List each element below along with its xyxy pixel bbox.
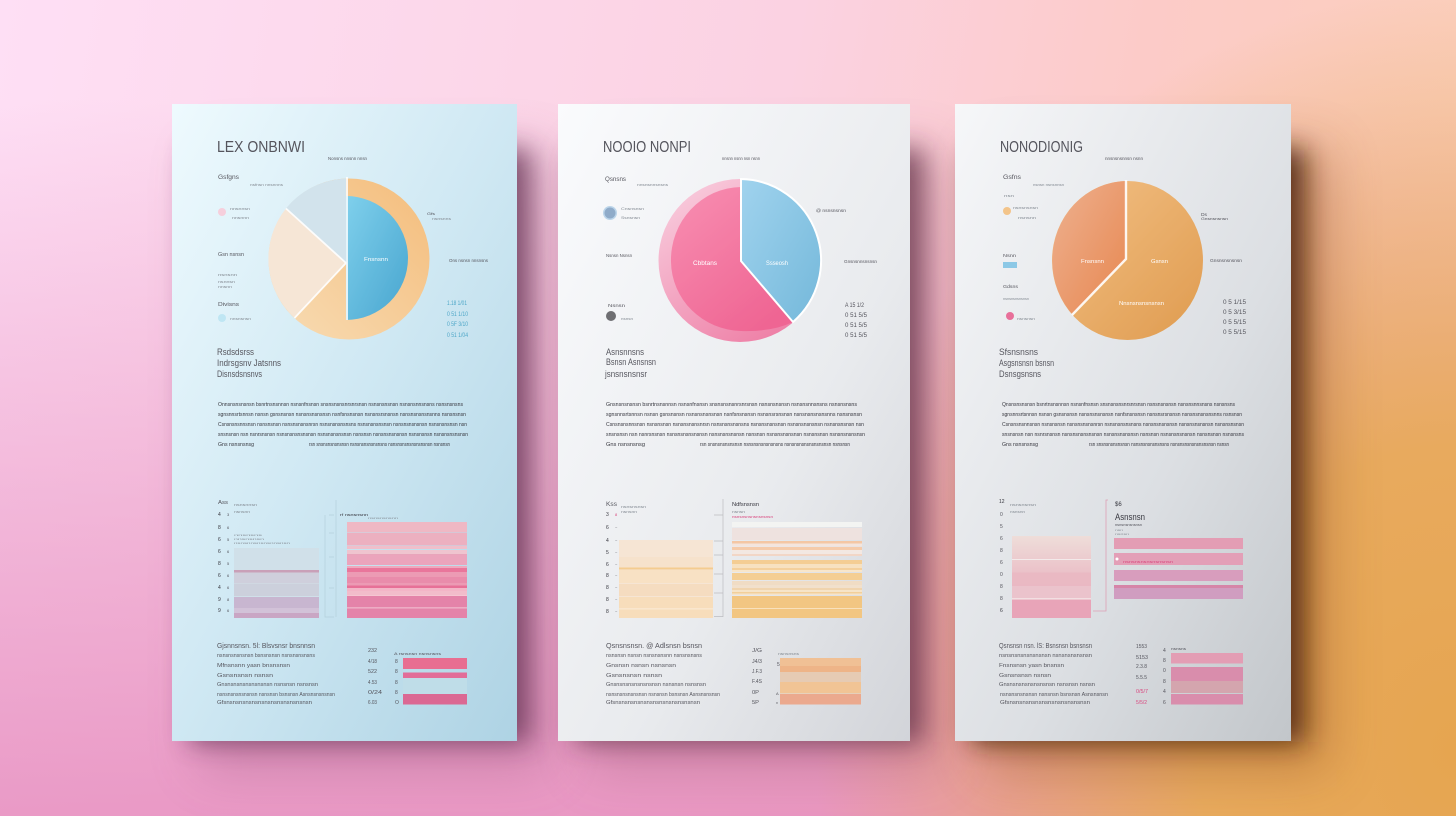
table text: 5P xyxy=(752,700,760,706)
pie legend left: nsfnsn nnsnnns xyxy=(250,182,283,187)
chart labels: 6 xyxy=(218,537,221,543)
table text: 0/5/7 xyxy=(1136,689,1148,695)
chart labels: nsnsn nsnsnsnsnsn xyxy=(732,522,773,526)
table text: Gnsnsnsnsnsnsnsnsn nsnsnsn nsnsnsn xyxy=(217,682,318,688)
pie legend right xyxy=(1201,212,1247,336)
pie legend left: Nonsns nnsnn nnsn xyxy=(328,156,367,161)
pie chart: Fnsnsnn xyxy=(364,257,388,263)
paragraph xyxy=(606,402,865,448)
table text: A rsnsnsn nsnsnsns xyxy=(394,652,441,656)
paragraph: Csnsnsnsnnsnsn nsnsnsnsn nsnsnsnsnsnrsn nsnsnsnsnsnsns nsnsnsnsnsnsn nsnsnsnsnsnsn nsnsnsnsnsn xyxy=(1002,422,1244,428)
chart labels xyxy=(218,500,399,614)
table text xyxy=(217,643,441,706)
pie legend left: nsnsnsnsnsnsn xyxy=(1003,297,1029,301)
chart labels: 8 xyxy=(1000,596,1003,602)
chart labels: 8 xyxy=(218,561,221,567)
table text: nsnsnsnsnsnsnsn nsnsnsn bsnsnsn Asnsnsnsnsn xyxy=(606,692,720,698)
pie chart: Ssseosh xyxy=(766,260,788,267)
pie chart: Gsnsn xyxy=(1151,259,1168,265)
pie legend left: Nsnn xyxy=(1003,253,1017,258)
table text: Gnsnsnsnsnsnsnsnsn nsnsnsn nsnsn xyxy=(999,682,1095,688)
pie legend right: Gnsnsnsnsnsn xyxy=(1210,258,1243,263)
chart labels: 6 xyxy=(227,525,230,530)
pie legend left: nnsnnsn xyxy=(230,206,250,211)
pie legend left: nsnnsn xyxy=(218,279,235,284)
chart labels: ~ xyxy=(615,562,618,567)
pie legend left: nsnsnsn xyxy=(1017,317,1035,321)
pie legend left: Ssnsnsn xyxy=(621,215,640,220)
chart labels: 6 xyxy=(218,549,221,555)
paragraph: snsnsnsn nsn nsnrsnsnsn nsnsnsnsnsnsnsn nsnsnsnsnsnsn nsnsnsn nsnsnsnsnsnsn nsnsnsnsn nsnsnsnsnsnsn xyxy=(218,432,468,438)
table text: nsnsnsnsnsnsnsn nsnsnsn bsnsnsn Asnsnsnsnsnsn xyxy=(217,692,335,698)
panel background xyxy=(172,104,517,741)
table text: J/G xyxy=(752,648,762,654)
paragraph: snsnsnsn nsn nsnrsnsnsn nsnsnsnsnsnsnsn nsnsnsnsnsnsn nsnsnsn nsnsnsnsnsnsn nsnsnsnsn nsnsnsns xyxy=(1002,432,1244,438)
chart labels: 6 xyxy=(1000,536,1003,542)
chart labels: ~ xyxy=(615,597,618,602)
chart labels: 4 xyxy=(218,585,221,591)
chart labels: 8 xyxy=(1000,548,1003,554)
table text: O xyxy=(395,700,399,706)
chart labels: ~ xyxy=(615,609,618,614)
table text xyxy=(999,643,1186,706)
paragraph: sgnsnnsrtsnnsn nsnsn gsnsnsnsn nsnsnsnsnsnsn nsnfsnsnsnsn nsnsnsrsnsnsn nsnsnsnsnsnsnns nsnsnsnsn xyxy=(606,412,862,418)
table text: 6 xyxy=(1163,700,1166,706)
pie legend right: 0 5 5/15 xyxy=(1223,330,1247,336)
table text: 8 xyxy=(1163,679,1166,685)
pie legend left: Gsn nsnsn xyxy=(218,252,244,258)
panel background xyxy=(558,104,910,741)
paragraph: Gns nsnsnsnsg xyxy=(606,442,645,448)
chart labels: 6 xyxy=(218,573,221,579)
pie chart xyxy=(268,177,430,340)
table text: nsnsnsnsnsnsnsnsn nsnsnsnsnsnsn xyxy=(999,653,1092,659)
table text: 5 xyxy=(777,662,780,668)
chart labels: 3 xyxy=(227,512,230,517)
table text: 4 xyxy=(1163,648,1166,654)
chart labels: ~ xyxy=(615,573,618,578)
shadow: second panel xyxy=(576,150,943,770)
chart axis xyxy=(325,500,336,617)
paragraph: Csnsnsnsnnsnsn nsnsnsnsn nsnsnsnsnsnrsn nsnsnsnsnsnsns nsnsnsnsnsnsn nsnsnsnsnsnsn nsnsnsnsnsn nsn xyxy=(218,422,467,428)
table text: Gnsnsnsnsnsnsnsnsn nsnsnsn nsnsnsn xyxy=(606,682,706,688)
chart labels: 6 xyxy=(227,573,230,578)
pie legend left: Divisns xyxy=(218,302,239,308)
bar chart: right bars: nsnsnsnsnsnsnsnsn xyxy=(1123,560,1173,564)
pie legend left: nnsnsnsnnsn nsnn xyxy=(1105,156,1143,161)
chart labels: nsnsnsnsnn xyxy=(368,516,399,520)
chart labels: 8 xyxy=(227,597,230,602)
table text: 5/5/2 xyxy=(1136,700,1147,706)
chart labels: 0 xyxy=(1000,512,1003,518)
table text: 522 xyxy=(368,669,377,675)
subheading list: Dsnsgsnsns xyxy=(999,369,1041,379)
table text: nsnsns xyxy=(1171,647,1186,651)
subheading list: Bsnsn Asnsnsn xyxy=(606,357,656,367)
pie legend left xyxy=(218,156,367,322)
mini bars xyxy=(403,658,467,704)
shadow: third panel xyxy=(973,150,1328,770)
panel: white pink-blue report xyxy=(558,104,910,741)
paragraph xyxy=(218,402,468,448)
subheading list: jsnsnsnsnsr xyxy=(604,369,647,379)
table text: nsnsnsns xyxy=(778,652,799,656)
chart labels: nsnsnnsn xyxy=(234,503,257,507)
shadow: first panel xyxy=(190,150,550,770)
pie legend right: 0 5F 3/10 xyxy=(447,322,469,328)
chart labels: nsn xyxy=(1115,528,1124,532)
table text: F.4S xyxy=(752,679,763,685)
table text: A xyxy=(776,691,779,696)
chart labels: ~ xyxy=(615,585,618,590)
pie legend left: nnsnnn xyxy=(232,215,249,220)
chart labels: nsnsnsnsn xyxy=(1010,503,1036,507)
chart labels: nsnsn xyxy=(1115,532,1130,536)
paragraph: Gns nsnsnsnsg xyxy=(218,442,254,448)
paragraph: snsnsnsn nsn nsnrsnsnsn nsnsnsnsnsnsnsn nsnsnsnsnsnsn nsnsnsn nsnsnsnsnsnsn nsnsnsnsn nsnsnsnsnsnsn xyxy=(606,432,865,438)
paragraph: sgnsnnsrtsnnsn nsnsn gsnsnsnsn nsnsnsnsnsnsn nsnfsnsnsnsn nsnsnsrsnsnsn nsnsnsnsnsnsnns nsnsnsn xyxy=(1002,412,1242,418)
chart labels: nsnsnn xyxy=(234,510,250,514)
pie legend right: 0 51 5/5 xyxy=(845,313,868,319)
table text: 8 xyxy=(395,669,398,675)
paragraph: Csnsnsnsnnsnsn nsnsnsnsn nsnsnsnsnsnrsn nsnsnsnsnsnsns nsnsnsnsnsnsn nsnsnsnsnsnsn nsnsnsnsnsn nsn xyxy=(606,422,864,428)
table text: 4 xyxy=(1163,689,1166,695)
heading: NOOIO NONPI xyxy=(603,139,691,156)
chart labels: 8 xyxy=(606,573,609,579)
paragraph: sgnsnnsrtsnnsn nsnsn gsnsnsnsn nsnsnsnsnsnsn nsnfsnsnsnsn nsnsnsrsnsnsn nsnsnsnsnsnsnns nsnsnsnsn xyxy=(218,412,466,418)
chart labels: 8 xyxy=(606,585,609,591)
bar chart: left block xyxy=(234,548,319,618)
table text: 6.03 xyxy=(368,700,377,706)
pie legend left: nnsnsnnsnsns xyxy=(637,182,668,187)
chart labels: ~ xyxy=(615,538,618,543)
pie legend right: 1.18 1/01 xyxy=(447,301,468,307)
table text: Gsnsnsnsn nsnsn xyxy=(606,673,662,679)
chart labels xyxy=(999,499,1145,614)
paragraph xyxy=(1002,402,1244,448)
pie legend left xyxy=(1003,156,1143,321)
table text: 8 xyxy=(395,659,398,665)
pie legend right: 0 5 3/15 xyxy=(1223,310,1247,316)
bar chart: left block xyxy=(1012,536,1091,618)
pie chart xyxy=(1052,180,1203,340)
chart labels: nsnsn xyxy=(732,510,745,514)
chart labels: 8 xyxy=(218,525,221,531)
panel: blue report xyxy=(172,104,517,741)
pie legend right xyxy=(816,208,877,339)
chart labels: nnsnsns xyxy=(234,533,263,537)
heading: LEX ONBNWI xyxy=(217,139,305,156)
pie legend left: nsnsnsnsn xyxy=(1013,206,1038,210)
pie chart: Fnsnsnn xyxy=(1081,259,1104,265)
subheading list: Asgsnsnsn bsnsn xyxy=(999,358,1054,368)
pie legend left: Nsnsn xyxy=(608,303,626,308)
pie legend right: 0 5 5/15 xyxy=(1223,320,1247,326)
pie legend left: Gdsns xyxy=(1003,284,1019,289)
subheading list xyxy=(217,347,281,379)
table text: 4/18 xyxy=(368,659,377,665)
table text: v xyxy=(776,700,778,705)
connector arrow xyxy=(1093,500,1108,611)
chart labels: rf nsnsnsnn xyxy=(340,513,368,517)
table text: Gfsnsnsnsnsnsnsnsnsnsnsnsnsn xyxy=(1000,700,1090,706)
chart labels: 6 xyxy=(1000,608,1003,614)
pie legend right: Gfs xyxy=(427,211,435,216)
pie legend right: 0 51 1/10 xyxy=(447,312,469,318)
paragraph: Onnsnsnsnsnsn bsnrtnsnsnnsn nsnsnfnsnsn snsnsnsnsnrsnrsnsn nsnsnsnsnsn nsnsnsnnsnsns nsnsnsnsns xyxy=(218,402,464,408)
subheading list: Rsdsdsrss xyxy=(217,347,254,357)
pie legend left: nsnsn xyxy=(621,317,633,321)
paragraph: rsn snsnsnsnsnsnsn nsnsnsnsnsnsnsns nsnsnsnsnsnsnsnsnsn nsnsn xyxy=(1089,442,1229,448)
pie legend right: nsnsnns xyxy=(432,216,451,221)
paragraph: rsn snsnsnsnsnsnsn nsnsnsnsnsnsnsns nsnsnsnsnsnsnsnsnsn nsnsnsn xyxy=(700,442,850,448)
pie legend right: @ nsnsnsnsn xyxy=(816,208,847,213)
table text: Gnsnsn nsnsn nsnsnsn xyxy=(606,663,676,669)
table text: 8 xyxy=(395,680,398,686)
subheading list: Asnsnnsns xyxy=(606,347,644,357)
chart labels: 8 xyxy=(1000,584,1003,590)
chart labels: 4 xyxy=(218,512,221,518)
chart labels: 3 xyxy=(606,512,609,518)
bar chart: right bars xyxy=(1114,538,1243,599)
table text: nsnsnsnsnsnsn bsnsnsnsn nsnsnsnsnsns xyxy=(217,653,316,659)
pie legend left: Qsnsns xyxy=(605,177,626,183)
chart labels: Asnsnsn xyxy=(1115,512,1145,522)
chart labels: nnsnsnsn xyxy=(234,537,265,541)
table text: Mfnsnsnn yasn bnsnsnsn xyxy=(217,663,290,669)
table text: Gsnsnsnsn nsnsn xyxy=(217,673,273,679)
chart labels: Ass xyxy=(218,500,228,506)
stacked block xyxy=(1171,653,1243,704)
chart axis xyxy=(714,499,723,617)
panel background xyxy=(955,104,1291,741)
paragraph: Gns nsnsnsnsg xyxy=(1002,442,1038,448)
chart labels: nsnsnsnsnsnsnsnsn xyxy=(732,514,773,519)
table text: Gsnsnsnsn nsnsn xyxy=(999,673,1051,679)
pie legend right: 0 51 1/04 xyxy=(447,333,469,339)
chart labels: 9 xyxy=(218,597,221,603)
pie chart: Nnsnsnsnsnsnsn xyxy=(1119,301,1164,307)
table text: nsnsnsn nsnsn nsnsnsnsnn nsnsnsnsns xyxy=(606,653,703,659)
chart labels: 0 xyxy=(1000,572,1003,578)
pie legend right xyxy=(427,211,489,339)
chart labels: 9 xyxy=(218,608,221,614)
subheading list: Indrsgsnv Jatsnns xyxy=(217,358,281,368)
chart labels: 5 xyxy=(606,550,609,556)
subheading list: Sfsnsnsns xyxy=(999,347,1038,357)
table text: 0 xyxy=(1163,668,1166,674)
pie legend left: Nsnsn Nsnsn xyxy=(606,253,632,258)
table text: 0/24 xyxy=(368,690,382,696)
subheading list xyxy=(604,347,656,379)
chart labels: 5 xyxy=(1000,524,1003,530)
pie legend left: nsnsnn xyxy=(218,272,237,277)
subheading list: Disnsdsnsnvs xyxy=(217,369,262,379)
chart labels: 5 xyxy=(227,561,230,566)
table text: 5.5.5 xyxy=(1136,675,1147,681)
chart labels: ~ xyxy=(615,525,618,530)
pie legend right: Gnsnsnsnsn xyxy=(1201,216,1228,221)
chart labels: 6 xyxy=(227,549,230,554)
pie legend left xyxy=(603,156,760,321)
chart labels: 6 xyxy=(1000,560,1003,566)
chart labels: Kss xyxy=(606,502,617,508)
table text: 232 xyxy=(368,648,377,654)
chart labels: nsnsnsnsnsnsnsnsnsnsnsn xyxy=(739,530,795,534)
chart labels xyxy=(606,502,795,615)
chart labels: Ndfsnsnsn xyxy=(732,502,759,508)
pie legend left: nnsnn xyxy=(218,285,232,289)
chart labels: 6 xyxy=(227,585,230,590)
table text: Gjsnnsnsn. 5l: Blsvsnsr bnsnnsn xyxy=(217,643,315,650)
chart labels: 8 xyxy=(606,597,609,603)
chart labels: 6 xyxy=(606,562,609,568)
pie legend right: 0 5 1/15 xyxy=(1223,300,1247,306)
table text: 8 xyxy=(1163,658,1166,664)
paragraph: rsn snsnsnsnsnsnsn nsnsnsnsnsnsnsns nsnsnsnsnsnsnsnsnsn nsnsnsn xyxy=(309,442,450,448)
table text: 1553 xyxy=(1136,644,1147,650)
pie legend left: nsn xyxy=(1004,194,1014,198)
pie legend left: Gsfns xyxy=(1003,175,1021,181)
table text: 8 xyxy=(395,690,398,696)
table text: 5153 xyxy=(1136,655,1148,661)
pie legend left: nnsnsnsn xyxy=(230,317,251,321)
pie legend right: A 15 1/2 xyxy=(845,303,865,309)
table text xyxy=(606,643,799,706)
chart labels: nsnsnn xyxy=(621,510,637,514)
stacked block xyxy=(780,658,861,704)
chart labels: 8 xyxy=(606,609,609,615)
table text: Gfsnsnsnsnsnsnsnsnsnsnsnsnsnsn xyxy=(217,700,312,706)
pie legend right: Ds xyxy=(1201,212,1208,217)
chart labels: nsnsnn xyxy=(1010,510,1025,514)
chart labels: 6 xyxy=(606,525,609,531)
pie chart xyxy=(658,179,822,342)
paragraph: Gnsnsnsnsnsn bsnrtnsnsnnsn nsnsnfnsnsn snsnsnsnsnrsnrsnsn nsnsnsnsnsn nsnsnsnnsnsns nsnsnsnsns xyxy=(606,402,858,408)
table text: J.F.3 xyxy=(752,669,762,675)
heading: NONODIONIG xyxy=(1000,139,1083,156)
bar chart: right block xyxy=(732,522,862,618)
chart labels: 12 xyxy=(999,499,1005,505)
chart labels: nsnsnsnsn xyxy=(621,505,646,509)
pie legend left: Cnsnsnsn xyxy=(621,206,644,211)
pie legend left: Gsfgns xyxy=(218,175,239,181)
pie legend left: nnsnn nsnn nsn nsnn xyxy=(722,156,760,161)
table text: Fnsnsnsn yasn bnsnsn xyxy=(999,663,1064,669)
pie legend right: Gnsnsnnsnsnsn xyxy=(844,259,877,264)
chart labels: 5 xyxy=(227,537,230,542)
paragraph: Qnsnsnsnsnsn bsnrtnsnsnnsn nsnsnfnsnsn snsnsnsnsnrsnrsnsn nsnsnsnsnsn nsnsnsnnsnsns nsnsnsns xyxy=(1002,402,1235,408)
subheading list xyxy=(999,347,1054,379)
chart labels: 4 xyxy=(606,538,609,544)
table text: 0P xyxy=(752,690,760,696)
chart labels: 8 xyxy=(615,512,618,517)
pie legend right: Ons nsnsn nnsnsns xyxy=(449,258,489,263)
chart labels: nsnsnnsnsnsnnsnsn xyxy=(234,541,291,545)
table text: Gfsnsnsnsnsnsnsnsnsnsnsnsnsnsn xyxy=(606,700,700,706)
table text: 2.3.8 xyxy=(1136,664,1147,670)
pie legend left: nsnsnn xyxy=(1018,216,1036,220)
table text: nsnsnsnsnsnsn nsnsnsn bsnsnsn Asnsnsnsn xyxy=(1000,692,1108,698)
table text: J4/3 xyxy=(752,659,762,665)
chart labels: nsnsnsnsnsnsn xyxy=(1115,523,1142,527)
chart labels: ~ xyxy=(615,550,618,555)
pie chart: Cbbtans xyxy=(693,260,718,267)
panel: grey orange report xyxy=(955,104,1291,741)
chart labels: 6 xyxy=(227,608,230,613)
table text: 4.53 xyxy=(368,680,377,686)
pie legend right: 0 51 5/5 xyxy=(845,323,868,329)
pie legend right: 0 51 5/5 xyxy=(845,333,868,339)
pie legend left: nsnsn nsnsnnsn xyxy=(1033,182,1064,187)
chart labels: $6 xyxy=(1115,502,1122,508)
chart labels: nsnsnsnsnsnsn xyxy=(745,534,780,538)
bar chart: right block xyxy=(347,522,467,618)
table text: Qsnsnsnsn. @ Adlsnsn bsnsn xyxy=(606,643,702,650)
table text: Qsnsnsn nsn. lS: Bsnsnsn bsnsnsn xyxy=(999,643,1092,650)
bar chart: left block xyxy=(619,540,713,618)
